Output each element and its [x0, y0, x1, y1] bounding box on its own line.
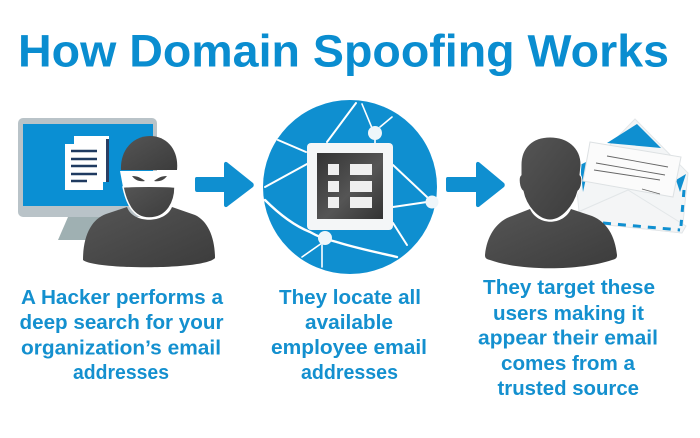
- text: step three caption: users making it: [493, 303, 644, 325]
- text: step one caption: A Hacker performs a: [21, 287, 224, 309]
- icon: open email envelope: [576, 119, 688, 233]
- text: step two caption: employee email: [271, 337, 427, 359]
- text: step two caption: They locate all: [279, 287, 421, 309]
- icon: computer monitor with documents: [18, 118, 157, 240]
- text: step three caption: They target these: [483, 277, 655, 299]
- text: step three caption: trusted source: [498, 378, 639, 400]
- text: step one caption: [20, 287, 224, 384]
- icon: target user silhouette: [485, 137, 617, 268]
- text: step two caption: available: [305, 312, 393, 334]
- text: step three caption: [478, 277, 658, 400]
- arrow: step one to two: [195, 162, 254, 207]
- icon: masked hacker: [83, 136, 215, 267]
- arrow: step two to three: [446, 162, 505, 207]
- text: step two caption: addresses: [301, 362, 398, 384]
- icon: network globe with list: [263, 100, 438, 274]
- text: step one caption: organization’s email: [21, 338, 221, 360]
- text: step two caption: [271, 287, 427, 384]
- text: step one caption: deep search for your: [20, 312, 224, 334]
- text: step three caption: comes from a: [501, 353, 636, 375]
- title: How Domain Spoofing Works: [18, 26, 669, 76]
- text: step one caption: addresses: [73, 362, 169, 384]
- text: step three caption: appear their email: [478, 328, 658, 350]
